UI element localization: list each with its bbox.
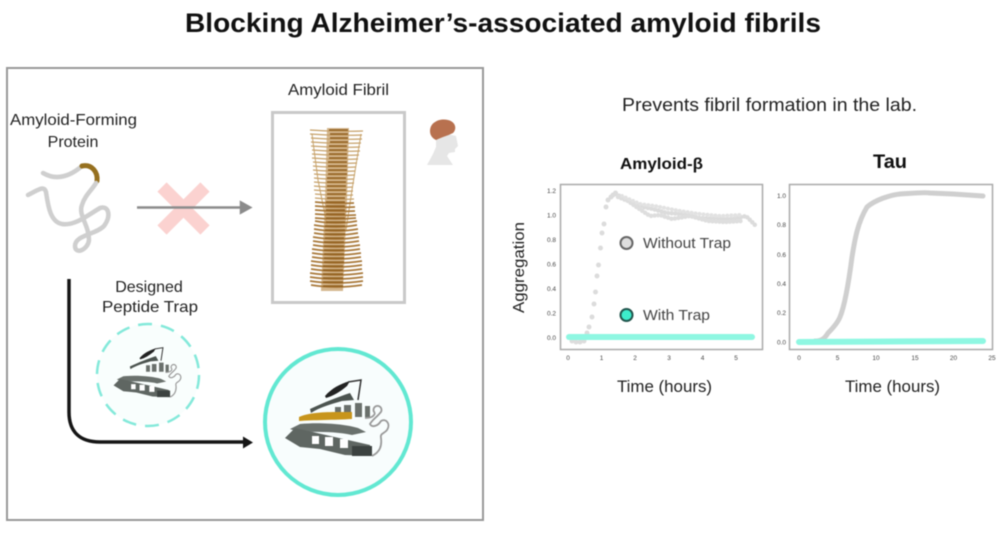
y axis ticks: 0.2 (547, 310, 556, 318)
label: amyloid fibril: Amyloid Fibril (288, 82, 389, 99)
y axis ticks: 0.4 (547, 286, 556, 293)
icon: dashed circle peptide trap (97, 324, 199, 426)
x axis ticks: 5 (836, 355, 840, 362)
panel: fibril frame (272, 112, 404, 302)
x axis label: Time (hours) (617, 377, 712, 396)
chart title: Tau (873, 152, 907, 173)
y axis ticks: 1.0 (547, 212, 556, 220)
label: amyloid-forming protein (10, 112, 137, 151)
y axis ticks: 0.8 (547, 237, 556, 244)
label: designed peptide trap: Peptide Trap (102, 299, 198, 316)
y axis ticks (777, 193, 786, 346)
x axis ticks: 5 (734, 355, 738, 362)
icon: blocked cross (162, 187, 205, 230)
x axis ticks: 3 (667, 355, 671, 362)
label: designed peptide trap: Designed (115, 279, 183, 296)
y axis ticks: 0.0 (777, 340, 786, 346)
x axis ticks: 0 (797, 355, 801, 362)
y axis label: Aggregation (511, 222, 528, 313)
y axis ticks: 0.6 (777, 252, 786, 259)
x axis ticks: 4 (701, 355, 705, 362)
chart title: Amyloid-β (620, 156, 703, 173)
label: designed peptide trap (102, 279, 198, 316)
label: amyloid-forming protein: Protein (48, 134, 98, 151)
icon: head with brain (427, 119, 458, 165)
x axis ticks: 25 (988, 355, 996, 362)
chart: tau aggregation (777, 152, 996, 396)
x axis ticks (566, 355, 738, 362)
illustration: amyloid fibril (310, 128, 363, 291)
y axis ticks (547, 188, 556, 342)
label: amyloid-forming protein: Amyloid-Forming (10, 112, 137, 129)
x axis ticks: 15 (911, 355, 919, 362)
legend: without trap: Without Trap (643, 235, 731, 252)
arrow: blocked pathway (137, 202, 250, 212)
series: without trap (570, 190, 755, 344)
y axis ticks: 0.8 (777, 222, 786, 229)
chart: amyloid-beta aggregation (511, 156, 762, 396)
y axis ticks: 1.0 (777, 193, 786, 200)
x axis ticks (797, 355, 996, 362)
series: with trap (569, 334, 752, 340)
protein structure: trap with peptide (285, 380, 388, 456)
heading: lab results: Prevents fibril formation in the lab. (622, 95, 917, 115)
y axis ticks: 1.2 (547, 188, 556, 195)
panel: mechanism diagram (7, 68, 483, 520)
title: Blocking Alzheimer’s-associated amyloid fibrils (185, 8, 821, 38)
protein structure: trap alone (114, 348, 181, 397)
arrow: trap binding pathway (69, 279, 253, 448)
y axis ticks: 0.2 (777, 310, 786, 317)
legend: with trap: With Trap (643, 307, 710, 324)
x axis label: Time (hours) (845, 377, 940, 396)
icon: unfolded protein strand (28, 166, 108, 251)
series: with trap (799, 341, 983, 342)
series: without trap (815, 193, 983, 341)
x axis ticks: 20 (950, 355, 957, 362)
x axis ticks: 10 (872, 355, 880, 362)
x axis ticks: 2 (633, 355, 637, 362)
y axis ticks: 0.4 (777, 281, 786, 288)
x axis ticks: 1 (600, 355, 604, 362)
x axis ticks: 0 (566, 355, 570, 362)
y axis ticks: 0.0 (547, 335, 556, 342)
y axis ticks: 0.6 (547, 262, 556, 268)
icon: trap bound to amyloid peptide (265, 349, 411, 495)
bound amyloid peptide strand (299, 412, 352, 421)
